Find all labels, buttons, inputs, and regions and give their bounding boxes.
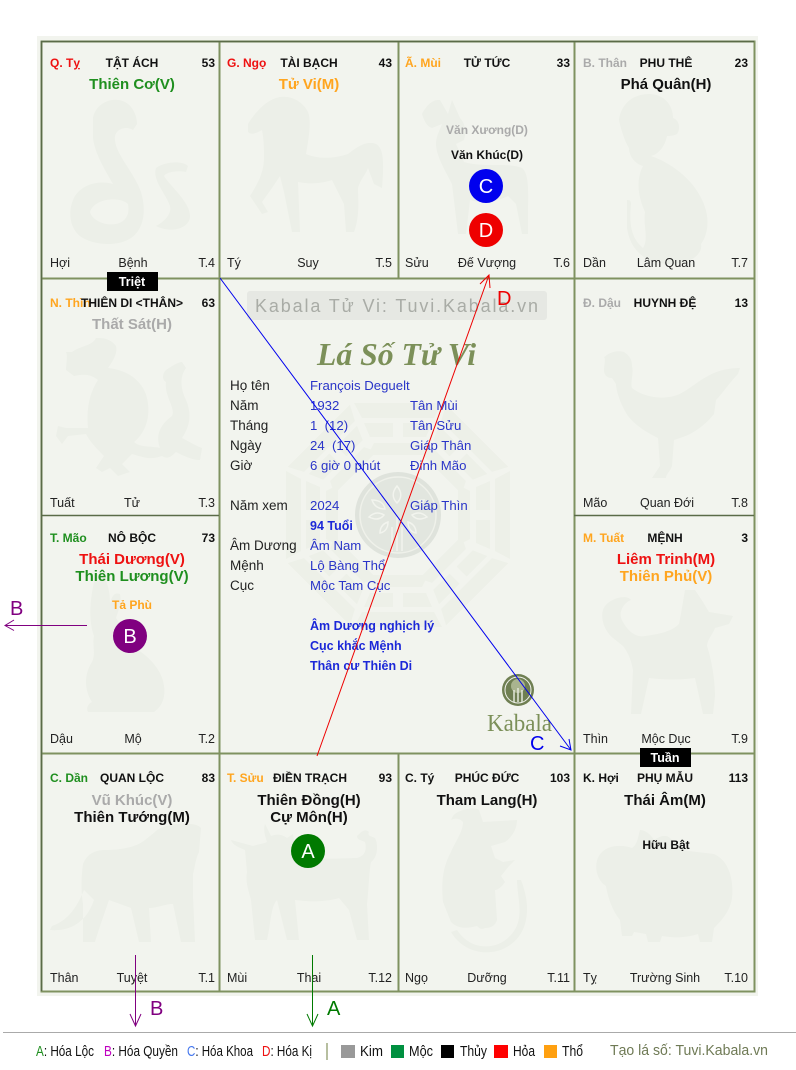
marker: B: B <box>123 626 137 648</box>
marker: A <box>291 834 325 868</box>
palace: Tử Tức: Ã. Mùi <box>405 55 441 70</box>
arrow: Hóa Lộc A down: A <box>327 998 341 1020</box>
personal information: Tháng <box>230 418 268 433</box>
legend: ngũ hành: Mộc <box>409 1044 433 1060</box>
palace: Quan Lộc: Vũ Khúc(V) <box>92 792 172 809</box>
zodiac watermarks <box>50 94 740 952</box>
badge: Tuần <box>640 748 691 767</box>
palace: Quan Lộc: C. Dần <box>50 771 88 785</box>
badge: Triệt <box>107 272 158 291</box>
rooster <box>604 351 740 478</box>
personal information: 2024 <box>310 498 339 513</box>
legend: tứ hóa: C: Hóa Khoa <box>187 1044 254 1060</box>
personal information: Cục <box>230 578 254 593</box>
palace: Tài Bạch: Suy <box>297 256 320 270</box>
palace: Phúc Đức: PHÚC ĐỨC <box>455 770 520 785</box>
palace: Tật Ách <box>50 55 215 270</box>
palace: Tử Tức: 33 <box>557 56 570 70</box>
palace: Mệnh: MỆNH <box>647 530 683 545</box>
legend: tứ hóa: B: Hóa Quyền <box>104 1044 178 1060</box>
palace: Tật Ách: Thiên Cơ(V) <box>89 76 175 93</box>
palace: Thiên Di: Thất Sát(H) <box>92 316 172 333</box>
palace: Tật Ách: 53 <box>202 56 215 70</box>
palace: Phu Thê <box>583 55 748 270</box>
marker: A: A <box>301 841 315 863</box>
palace: Mệnh: Liêm Trinh(M) <box>617 551 715 568</box>
palace: Phu Thê: Phá Quân(H) <box>621 76 711 93</box>
palace: Tật Ách: Q. Tỵ <box>50 56 80 70</box>
palace: Tài Bạch: T.5 <box>375 256 392 270</box>
palace: Phụ Mẫu: K. Hợi <box>583 771 619 785</box>
palace: Phu Thê: PHU THÊ <box>640 55 692 70</box>
personal information: Âm Dương <box>230 538 297 553</box>
footer rule <box>3 1032 796 1034</box>
chart title: Lá Số Tử Vi <box>316 336 476 372</box>
legend: ngũ hành: Kim <box>360 1044 383 1060</box>
palace: Phụ Mẫu: Hữu Bật <box>642 838 690 852</box>
palace: Thiên Di: Tử <box>124 496 140 510</box>
palace: Tử Tức <box>405 55 570 270</box>
palace: Tử Tức: Sửu <box>405 256 429 270</box>
arrow: Hóa Kị D: D <box>497 288 511 310</box>
palace: Điền Trạch: ĐIỀN TRẠCH <box>273 770 347 785</box>
legend: tứ hóa <box>36 1044 312 1060</box>
palace: Thiên Di: THIÊN DI <THÂN> <box>81 295 183 310</box>
dragon <box>56 338 202 476</box>
palace: Phụ Mẫu <box>583 770 748 985</box>
palace: Điền Trạch: T.12 <box>368 971 392 985</box>
palace: Tài Bạch: Tử Vi(M) <box>279 76 339 93</box>
palace: Điền Trạch <box>227 770 392 985</box>
personal information: François Deguelt <box>310 378 410 393</box>
palace: Tật Ách: Bệnh <box>118 256 148 270</box>
palace: Phúc Đức: 103 <box>550 771 570 785</box>
personal information: Đinh Mão <box>410 458 466 473</box>
palace: Phúc Đức: Tham Lang(H) <box>437 792 537 809</box>
Kabala logo <box>487 674 552 737</box>
palace: Phụ Mẫu: Thái Âm(M) <box>624 791 706 809</box>
palace: Tử Tức: Văn Xương(D) <box>446 123 528 137</box>
palace: Điền Trạch: Thiên Đồng(H) <box>257 792 361 809</box>
horse <box>248 97 383 232</box>
palace: Quan Lộc: QUAN LỘC <box>100 770 164 785</box>
palace: Phu Thê: Lâm Quan <box>637 256 695 270</box>
palace: Tài Bạch: G. Ngọ <box>227 56 266 70</box>
palace: Phu Thê: Dần <box>583 256 606 270</box>
personal information <box>230 378 471 673</box>
palace: Mệnh: Thiên Phủ(V) <box>620 568 712 585</box>
palace grid <box>41 41 754 992</box>
personal information: Giờ <box>230 458 252 473</box>
palace: Phụ Mẫu: Tỵ <box>583 971 598 985</box>
palace: Điền Trạch: T. Sửu <box>227 771 264 785</box>
goat <box>422 100 528 234</box>
personal information: Âm Dương nghịch lý <box>310 618 434 633</box>
marker: C <box>469 169 503 203</box>
palace: Phúc Đức: Ngọ <box>405 971 428 985</box>
palace: Nô Bộc <box>50 530 215 746</box>
palace: Phúc Đức: T.11 <box>547 971 570 985</box>
palace: Phúc Đức: Dưỡng <box>467 971 507 985</box>
personal information: Năm xem <box>230 498 288 513</box>
personal information: 94 Tuổi <box>310 519 353 533</box>
palace: Nô Bộc: 73 <box>202 531 215 545</box>
footer credit: Tạo lá số: Tuvi.Kabala.vn <box>610 1043 768 1059</box>
legend: tứ hóa: A: Hóa Lộc <box>36 1044 94 1060</box>
palace: Tài Bạch: 43 <box>379 56 392 70</box>
personal information: Mệnh <box>230 558 264 573</box>
ox <box>231 824 377 940</box>
palace: Quan Lộc: Thân <box>50 971 79 985</box>
personal information: Họ tên <box>230 378 270 393</box>
marker: B <box>113 619 147 653</box>
badge: Tuần: Tuần <box>651 751 679 765</box>
palace: Tử Tức: Văn Khúc(D) <box>451 148 523 162</box>
personal information: 1 (12) <box>310 418 348 433</box>
palace: Điền Trạch: Mùi <box>227 971 247 985</box>
personal information: Âm Nam <box>310 538 361 553</box>
site banner: Kabala Tử Vi: Tuvi.Kabala.vn <box>255 296 538 316</box>
arrow: Hóa Kị D <box>317 275 511 756</box>
arrow: Hóa Lộc A down <box>307 955 341 1026</box>
palace: Phu Thê: 23 <box>735 56 748 70</box>
monkey <box>619 94 707 264</box>
palace: Nô Bộc: NÔ BỘC <box>108 530 156 545</box>
palace: Huynh Đệ: Đ. Dậu <box>583 296 621 310</box>
arrow: Hóa Quyền B down: B <box>150 998 163 1020</box>
arrow: Hóa Quyền B left: B <box>10 598 23 620</box>
arrow: Hóa Khoa C <box>220 278 571 755</box>
marker: D <box>469 213 503 247</box>
palace: Quan Lộc: Thiên Tướng(M) <box>74 809 190 826</box>
palace: Phụ Mẫu: Trường Sinh <box>630 971 700 985</box>
palace: Huynh Đệ: 13 <box>735 296 748 310</box>
legend: ngũ hành <box>341 1044 583 1060</box>
arrow: Hóa Khoa C: C <box>530 733 544 755</box>
palace: Thiên Di <box>50 295 215 510</box>
palace: Nô Bộc: Mộ <box>124 732 142 746</box>
personal information: Giáp Thân <box>410 438 471 453</box>
palace: Tử Tức: Đế Vượng <box>458 256 516 270</box>
palace: Mệnh: T.9 <box>731 732 748 746</box>
palace: Tài Bạch: Tý <box>227 256 242 270</box>
palace: Thiên Di: N. Thìn <box>50 296 91 310</box>
palace: Quan Lộc: 83 <box>202 771 215 785</box>
personal information: Ngày <box>230 438 262 453</box>
personal information: Giáp Thìn <box>410 498 468 513</box>
palace: Tử Tức: T.6 <box>553 256 570 270</box>
rabbit <box>86 574 164 712</box>
palace: Tài Bạch: TÀI BẠCH <box>280 55 338 70</box>
palace: Tật Ách: Hợi <box>50 256 70 270</box>
bagua watermark <box>286 403 510 627</box>
palace: Mệnh: M. Tuất <box>583 531 624 545</box>
palace: Thiên Di: Tuất <box>50 496 75 510</box>
palace: Huynh Đệ <box>583 295 748 510</box>
palace: Tật Ách: T.4 <box>198 256 215 270</box>
personal information: 1932 <box>310 398 339 413</box>
marker: D: D <box>479 220 493 242</box>
palace: Quan Lộc: Tuyệt <box>117 971 148 985</box>
palace: Quan Lộc <box>50 770 215 985</box>
personal information: Tân Sửu <box>410 418 461 433</box>
palace: Huynh Đệ: Quan Đới <box>640 496 694 510</box>
palace: Nô Bộc: Thái Dương(V) <box>79 551 185 568</box>
arrow: Hóa Quyền B down <box>130 955 163 1026</box>
badge: Triệt: Triệt <box>119 275 146 289</box>
palace: Thiên Di: 63 <box>202 296 215 310</box>
legend: ngũ hành: Hỏa <box>513 1044 536 1060</box>
legend: tứ hóa: D: Hóa Kị <box>262 1044 312 1060</box>
tiger <box>50 824 201 942</box>
palace: Nô Bộc: Dậu <box>50 732 73 746</box>
palace: Phúc Đức <box>405 770 570 985</box>
personal information: Tân Mùi <box>410 398 458 413</box>
palace: Phụ Mẫu: T.10 <box>724 971 748 985</box>
personal information: 6 giờ 0 phút <box>310 458 381 473</box>
site banner <box>247 291 547 320</box>
palace: Phúc Đức: C. Tý <box>405 771 435 785</box>
personal information: Mộc Tam Cục <box>310 578 391 593</box>
palace: Phụ Mẫu: PHỤ MẪU <box>637 770 693 785</box>
palace: Phu Thê: B. Thân <box>583 56 627 70</box>
palace: Phụ Mẫu: 113 <box>729 771 748 785</box>
palace: Điền Trạch: Cự Môn(H) <box>270 809 348 826</box>
palace: Mệnh: 3 <box>741 531 748 545</box>
legend: ngũ hành: Thổ <box>562 1044 583 1060</box>
personal information: Thân cư Thiên Di <box>310 659 412 673</box>
palace: Nô Bộc: T.2 <box>198 732 215 746</box>
palace: Phu Thê: T.7 <box>731 256 748 270</box>
palace: Thiên Di: T.3 <box>198 496 215 510</box>
pig <box>596 830 732 942</box>
marker: C: C <box>479 176 493 198</box>
arrow: Hóa Quyền B left <box>5 598 87 630</box>
personal information: Lộ Bàng Thổ <box>310 558 385 573</box>
palace: Tật Ách: TẬT ÁCH <box>106 55 158 70</box>
dog <box>602 590 733 714</box>
palace: Quan Lộc: T.1 <box>198 971 215 985</box>
palace: Huynh Đệ: HUYNH ĐỆ <box>634 295 696 310</box>
palace: Điền Trạch: 93 <box>379 771 392 785</box>
personal information: 24 (17) <box>310 438 355 453</box>
palace: Nô Bộc: Thiên Lương(V) <box>75 568 189 585</box>
palace: Nô Bộc: Tả Phù <box>112 598 152 612</box>
palace: Mệnh: Thìn <box>583 732 608 746</box>
legend divider <box>326 1043 328 1060</box>
personal information: Cục khắc Mệnh <box>310 638 402 653</box>
palace: Mệnh <box>583 530 748 746</box>
rat <box>442 808 527 952</box>
Kabala logo: Kabala <box>487 711 552 737</box>
tree emblem watermark <box>355 472 441 558</box>
palace: Mệnh: Mộc Dục <box>641 732 691 746</box>
palace: Tài Bạch <box>227 55 392 270</box>
palace: Điền Trạch: Thai <box>297 971 321 985</box>
palace: Huynh Đệ: Mão <box>583 496 607 510</box>
snake <box>70 100 190 244</box>
personal information: Năm <box>230 398 259 413</box>
palace: Huynh Đệ: T.8 <box>731 496 748 510</box>
legend: ngũ hành: Thủy <box>460 1044 488 1060</box>
palace: Tử Tức: TỬ TỨC <box>464 55 511 70</box>
palace: Nô Bộc: T. Mão <box>50 531 87 545</box>
